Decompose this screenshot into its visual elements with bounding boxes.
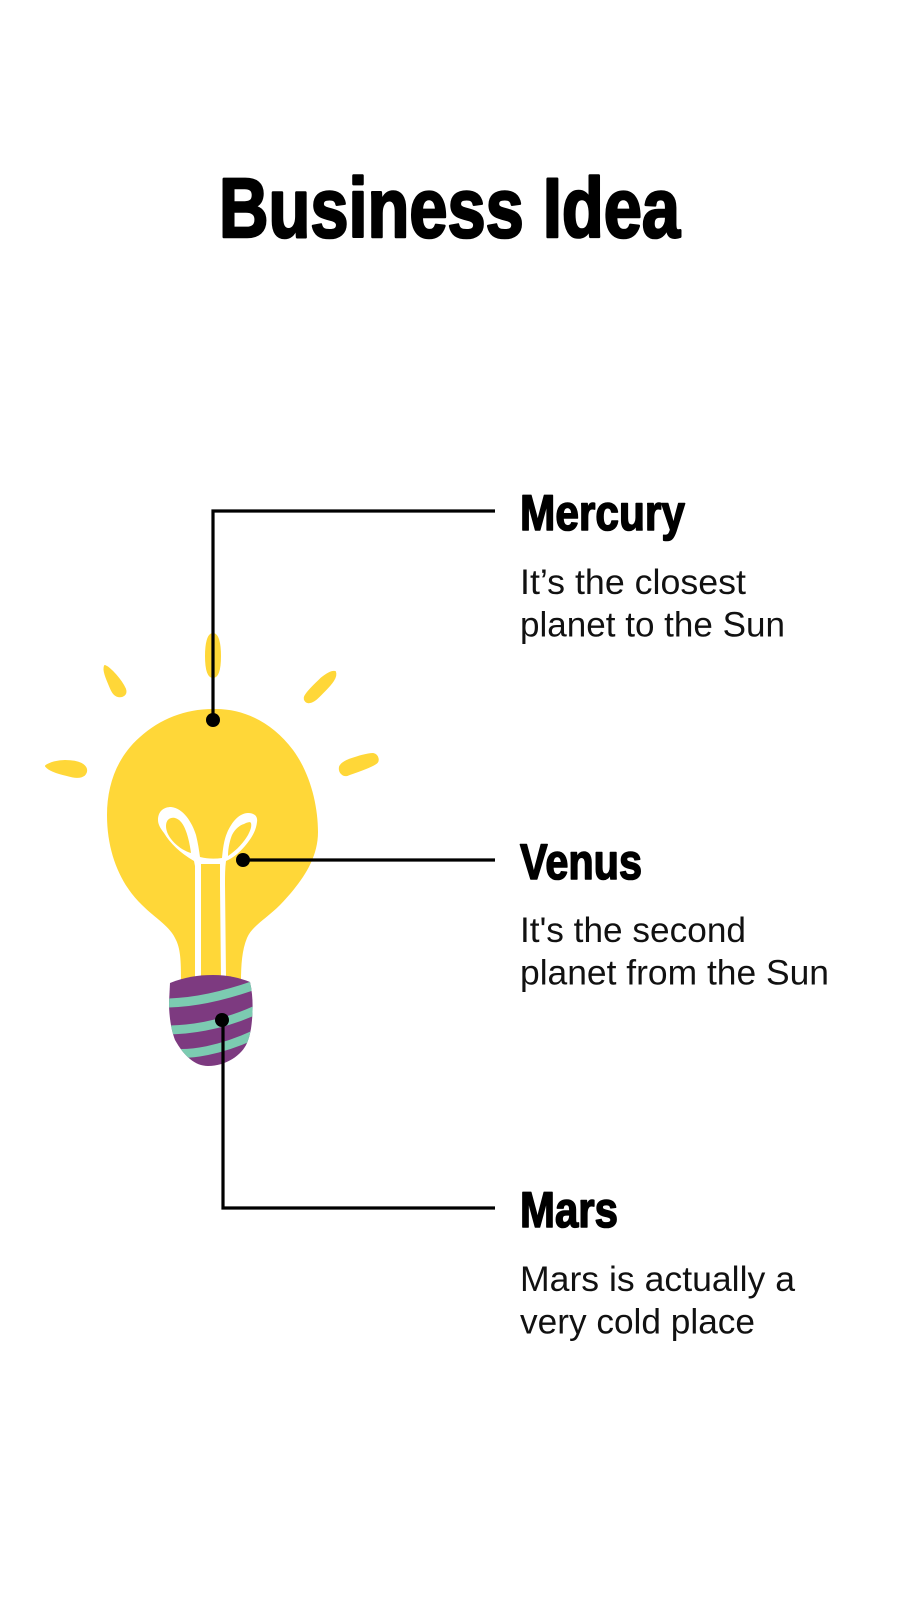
description: Venus: planet from the Sun xyxy=(520,954,829,992)
description: Mercury: It’s the closest xyxy=(520,563,746,602)
title: Business Idea xyxy=(219,161,681,255)
bulb socket xyxy=(165,975,258,1066)
description: Mars xyxy=(520,1260,796,1342)
text block: Venus xyxy=(520,834,829,992)
filament xyxy=(158,807,257,978)
text block: Mars xyxy=(520,1182,796,1342)
heading: Mercury: Mercury xyxy=(520,485,685,541)
description: Venus xyxy=(520,911,829,992)
connector: Mercury xyxy=(206,511,495,727)
description: Mercury: planet to the Sun xyxy=(520,606,785,644)
description: Mars: very cold place xyxy=(520,1302,755,1342)
heading: Mars: Mars xyxy=(520,1182,618,1238)
icon: light bulb xyxy=(46,634,378,1066)
description: Venus: It's the second xyxy=(520,911,746,950)
description: Mars: Mars is actually a xyxy=(520,1260,796,1299)
connector: Mars xyxy=(215,1013,495,1208)
bulb glass xyxy=(107,709,318,982)
heading: Venus: Venus xyxy=(520,834,642,890)
description: Mercury xyxy=(520,563,785,644)
connector: Venus xyxy=(236,853,495,867)
text block: Mercury xyxy=(520,485,785,644)
icon: light rays xyxy=(46,634,378,777)
